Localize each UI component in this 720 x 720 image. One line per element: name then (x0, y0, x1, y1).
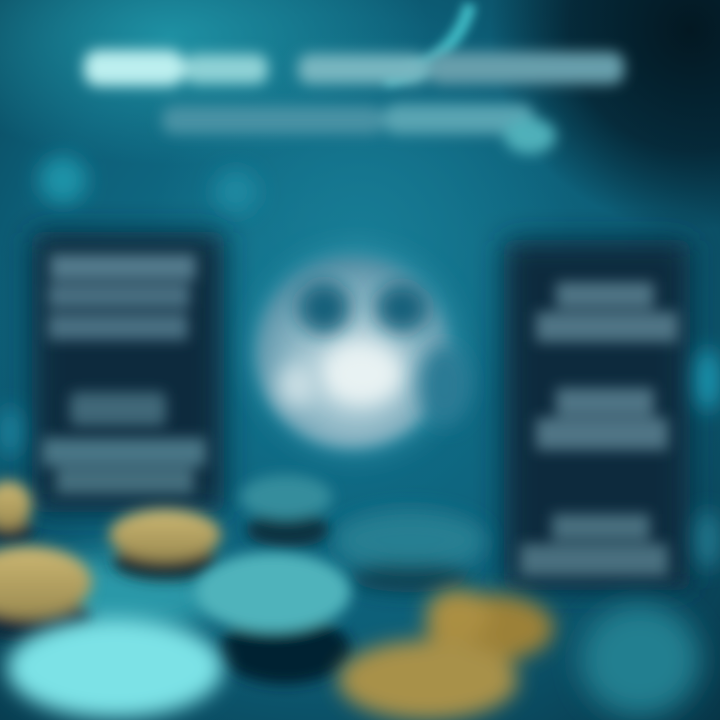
title line two (162, 106, 384, 134)
text block: left middle (70, 392, 166, 426)
title line one, left (84, 50, 184, 86)
icon: central globe (254, 250, 471, 454)
coin: teal small (240, 475, 332, 548)
globe dark spot right (376, 284, 428, 332)
panel: left (32, 232, 224, 512)
panel: right (504, 240, 690, 590)
title (84, 50, 624, 154)
text block: right upper (536, 282, 678, 342)
coin: gold far left (0, 481, 34, 544)
globe dark spot left (298, 282, 350, 334)
text block: left upper (48, 254, 196, 340)
coin: bright cyan (7, 618, 223, 718)
text block: right middle (536, 388, 668, 450)
coin: gold cluster (338, 589, 554, 720)
teal base glow (20, 518, 480, 635)
coin: teal large (195, 552, 351, 684)
icon: glowing arc at top (385, 4, 470, 80)
coin: gold middle (109, 509, 221, 580)
coin: teal right (336, 514, 484, 592)
coin: teal lower right (580, 604, 700, 716)
decorative glow dots (39, 156, 258, 214)
text block: left lower (42, 438, 206, 494)
right edge glow (0, 348, 720, 570)
coin: gold large left (0, 546, 92, 642)
text block: right lower (520, 514, 668, 576)
